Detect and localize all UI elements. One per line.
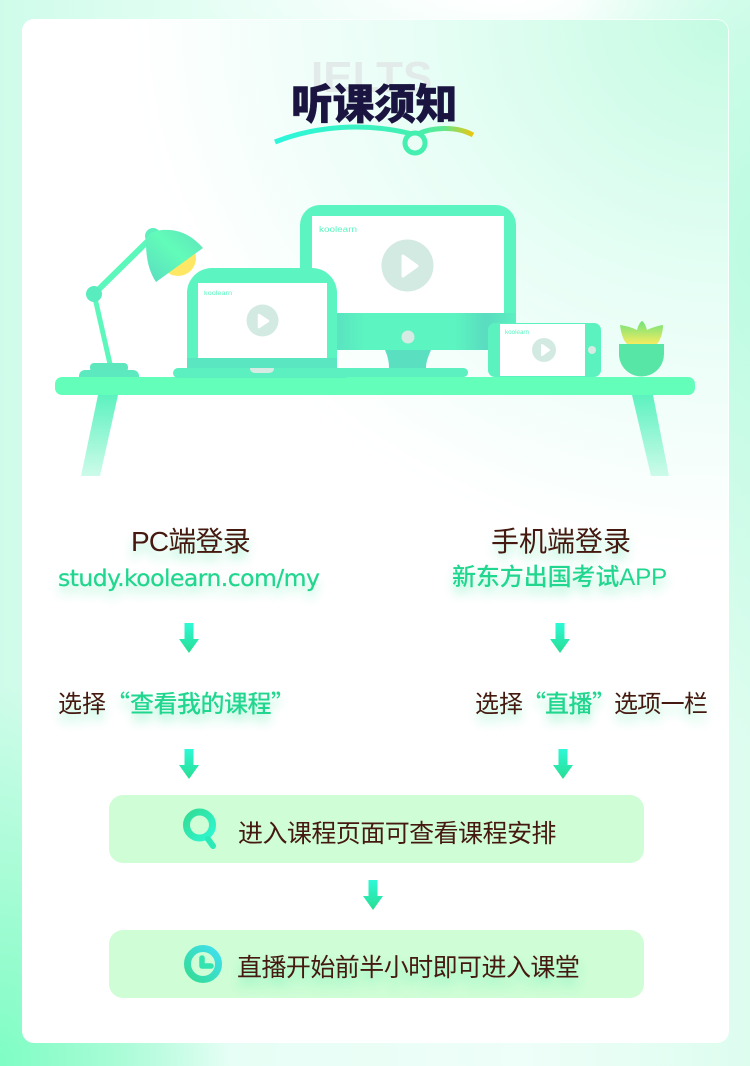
PC step text: 选择 查看我的课程 bbox=[58, 691, 271, 718]
watermark: IELTS: IELTS bbox=[311, 53, 432, 102]
lamp bbox=[79, 228, 203, 377]
arrow bbox=[553, 749, 573, 779]
table leg left bbox=[81, 395, 118, 476]
phone bbox=[488, 323, 601, 377]
icon: clock bbox=[184, 945, 222, 983]
title: 听课须知 bbox=[291, 71, 457, 132]
arrow bbox=[550, 623, 570, 653]
table leg right bbox=[632, 395, 669, 476]
icon: magnifier bbox=[183, 808, 216, 849]
phone: koolearn bbox=[505, 330, 529, 336]
mobile login heading: 手机端登录 bbox=[491, 526, 631, 557]
PC step text: ” bbox=[271, 684, 295, 719]
mobile app name: 新东方出国考试APP bbox=[452, 564, 667, 591]
arrow bbox=[179, 623, 199, 653]
mobile step text: 选择 直播 选项一栏 bbox=[475, 691, 707, 718]
PC login heading: PC端登录 bbox=[131, 526, 250, 557]
PC step text: “ bbox=[106, 684, 130, 719]
box: course page bbox=[109, 795, 644, 863]
desk illustration bbox=[55, 205, 695, 476]
PC step text bbox=[57, 684, 295, 727]
laptop bbox=[173, 268, 350, 378]
potted plant bbox=[619, 321, 664, 376]
title swoosh underline bbox=[274, 124, 474, 156]
text: 进入课程页面可查看课程安排 bbox=[238, 820, 556, 848]
arrow bbox=[363, 880, 383, 910]
table top bbox=[55, 377, 695, 395]
monitor screen logo: koolearn bbox=[319, 225, 357, 234]
laptop: koolearn bbox=[204, 291, 232, 297]
PC login url: study.koolearn.com/my bbox=[58, 564, 319, 592]
arrow bbox=[179, 749, 199, 779]
mobile step text: “ bbox=[522, 684, 546, 719]
monitor bbox=[300, 205, 516, 377]
mobile step text bbox=[474, 684, 708, 727]
box: live start bbox=[109, 930, 644, 998]
monitor play button bbox=[382, 240, 434, 292]
text: 直播开始前半小时即可进入课堂 bbox=[237, 954, 579, 982]
mobile step text: ” bbox=[592, 684, 616, 719]
